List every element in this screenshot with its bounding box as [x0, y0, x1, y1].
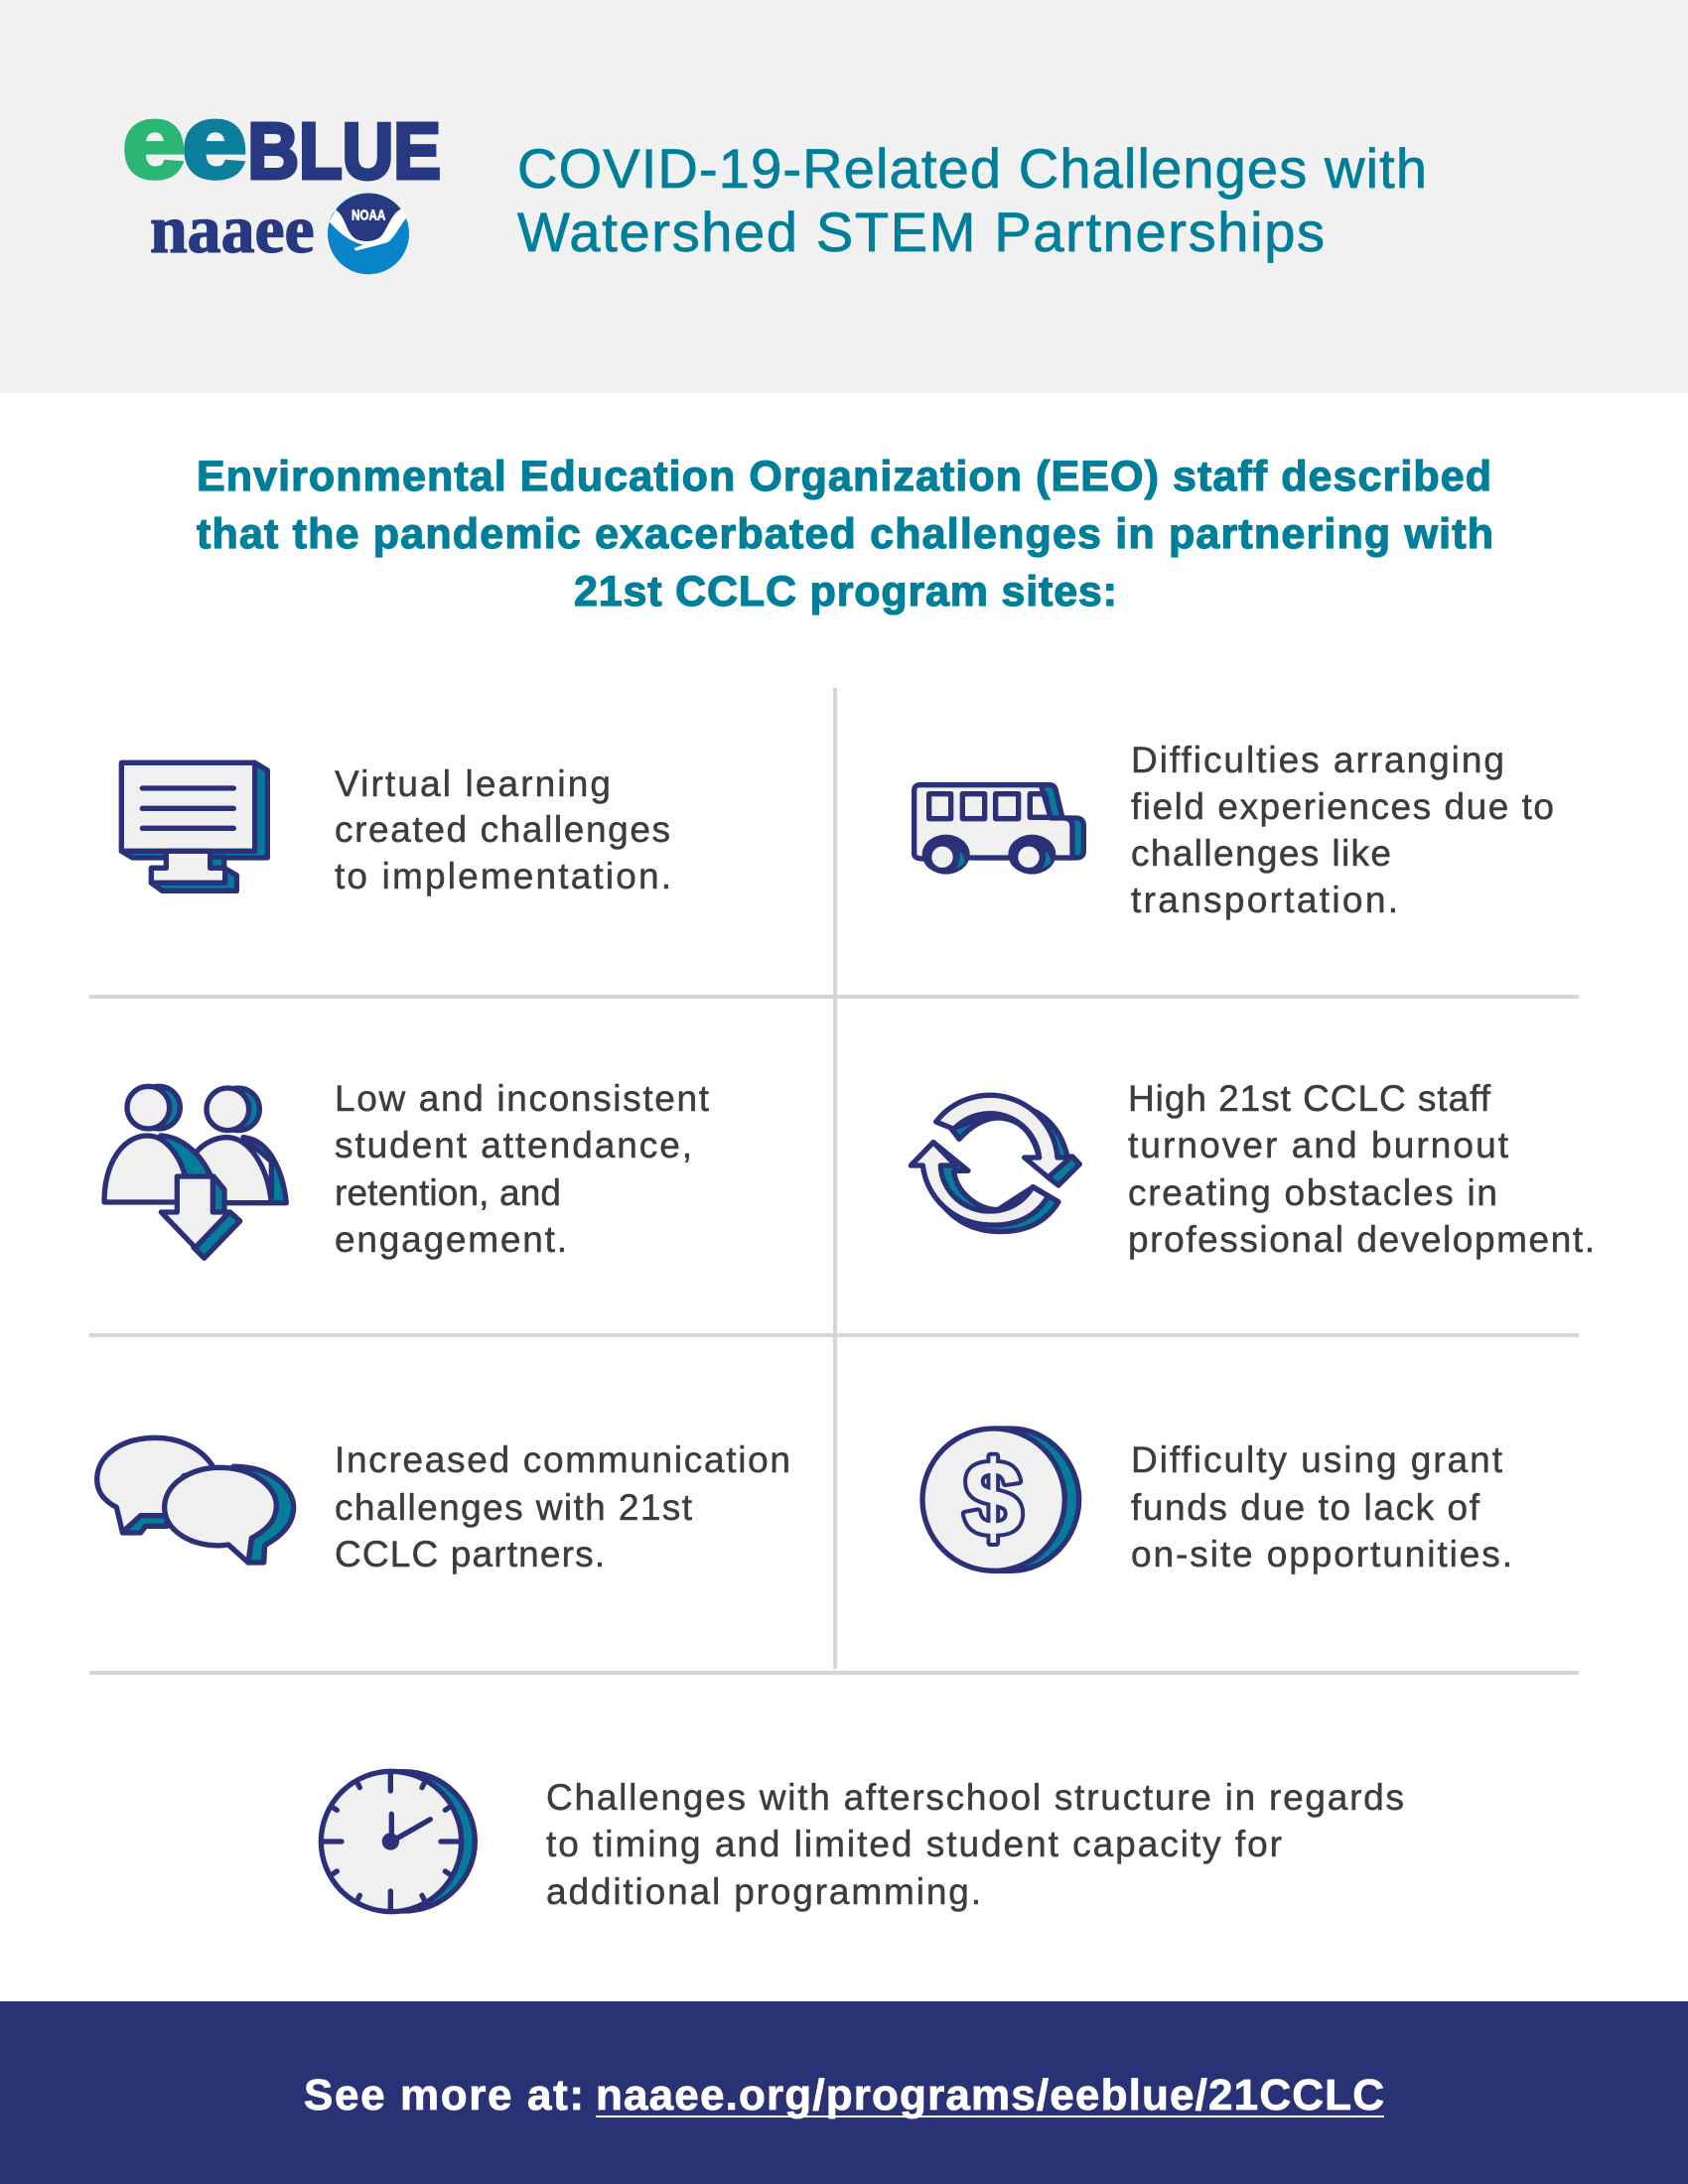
- text: student attendance: Low and inconsistent: [335, 1078, 710, 1119]
- text: grant funds: [1131, 1439, 1512, 1574]
- intro heading: that the pandemic exacerbated challenges in partnering with: [197, 510, 1493, 558]
- logo: eeBLUE: e: [122, 84, 186, 201]
- icon: speech bubbles: [97, 1437, 294, 1563]
- text: afterschool structure: Challenges with afterschool structure in regards: [546, 1777, 1404, 1818]
- text: staff turnover: creating obstacles in: [1128, 1172, 1497, 1213]
- icon glyph: dollar sign: $: [963, 1438, 1023, 1558]
- text: student attendance: retention, and: [335, 1172, 561, 1213]
- icon: computer monitor: [121, 762, 267, 890]
- logo: NOAA emblem: NOAA: [352, 208, 386, 224]
- footer link text: naaee.org/programs/eeblue/21CCLC: [596, 2071, 1384, 2119]
- logo: eeBLUE: [122, 84, 441, 201]
- text: virtual learning: to implementation.: [335, 856, 671, 896]
- text: field experiences: [1131, 740, 1554, 920]
- panel: grant funds: [922, 1429, 1512, 1574]
- icon: circular arrows: [911, 1095, 1079, 1232]
- text: field experiences: field experiences due to: [1131, 786, 1554, 827]
- text: grant funds: on-site opportunities.: [1131, 1534, 1512, 1574]
- title: Watershed STEM Partnerships: [517, 201, 1325, 263]
- intro heading: 21st CCLC program sites:: [574, 568, 1117, 615]
- icon: clock: [321, 1771, 475, 1912]
- text: communication: challenges with 21st: [335, 1487, 693, 1528]
- panel: field experiences: [914, 740, 1554, 920]
- text: staff turnover: professional development.: [1128, 1219, 1595, 1260]
- header band: [0, 0, 1688, 393]
- icon: dollar coin: [922, 1429, 1079, 1570]
- text: student attendance: student attendance,: [335, 1125, 692, 1165]
- text: field experiences: Difficulties arranging: [1131, 740, 1504, 780]
- panel: student attendance: [104, 1078, 710, 1260]
- text: communication: CCLC partners.: [335, 1534, 605, 1574]
- text: virtual learning: [335, 763, 671, 896]
- intro heading: Environmental Education Organization (EEO) staff described: [197, 453, 1491, 500]
- text: communication: Increased communication: [335, 1439, 790, 1480]
- text: staff turnover: [1128, 1078, 1595, 1260]
- text: afterschool structure: to timing and limited student capacity for: [546, 1824, 1282, 1864]
- title: [517, 137, 1427, 263]
- logo: NOAA emblem: [328, 193, 409, 274]
- logo: eeBLUE: e: [182, 84, 247, 201]
- text: virtual learning: created challenges: [335, 809, 670, 850]
- text: student attendance: engagement.: [335, 1219, 567, 1260]
- icon: bus: [914, 785, 1083, 875]
- text: grant funds: Difficulty using grant: [1131, 1439, 1503, 1480]
- text: staff turnover: High 21st CCLC staff: [1128, 1078, 1491, 1119]
- text: afterschool structure: [546, 1777, 1404, 1912]
- text: staff turnover: turnover and burnout: [1128, 1125, 1509, 1165]
- title: COVID-19-Related Challenges with: [517, 137, 1427, 200]
- footer band: [0, 2001, 1688, 2184]
- footer link text: See more at:: [304, 2071, 584, 2119]
- text: afterschool structure: additional programming.: [546, 1871, 981, 1912]
- text: communication: [335, 1439, 790, 1574]
- icon: people with down arrow: [104, 1086, 286, 1258]
- text: field experiences: transportation.: [1131, 880, 1398, 920]
- logo: naaee: naaee: [150, 192, 315, 267]
- logo group: eeBLUE, naaee, NOAA: [122, 84, 441, 274]
- panel: virtual learning: [121, 762, 671, 896]
- text: virtual learning: Virtual learning: [335, 763, 611, 804]
- text: field experiences: challenges like: [1131, 833, 1391, 874]
- panel: communication: [97, 1437, 790, 1574]
- text: student attendance: [335, 1078, 710, 1260]
- text: grant funds: funds due to lack of: [1131, 1487, 1480, 1528]
- panel: staff turnover: [911, 1078, 1595, 1260]
- logo: eeBLUE: BLUE: [247, 107, 441, 196]
- intro heading: [197, 453, 1493, 615]
- panel: afterschool structure: [321, 1771, 1404, 1912]
